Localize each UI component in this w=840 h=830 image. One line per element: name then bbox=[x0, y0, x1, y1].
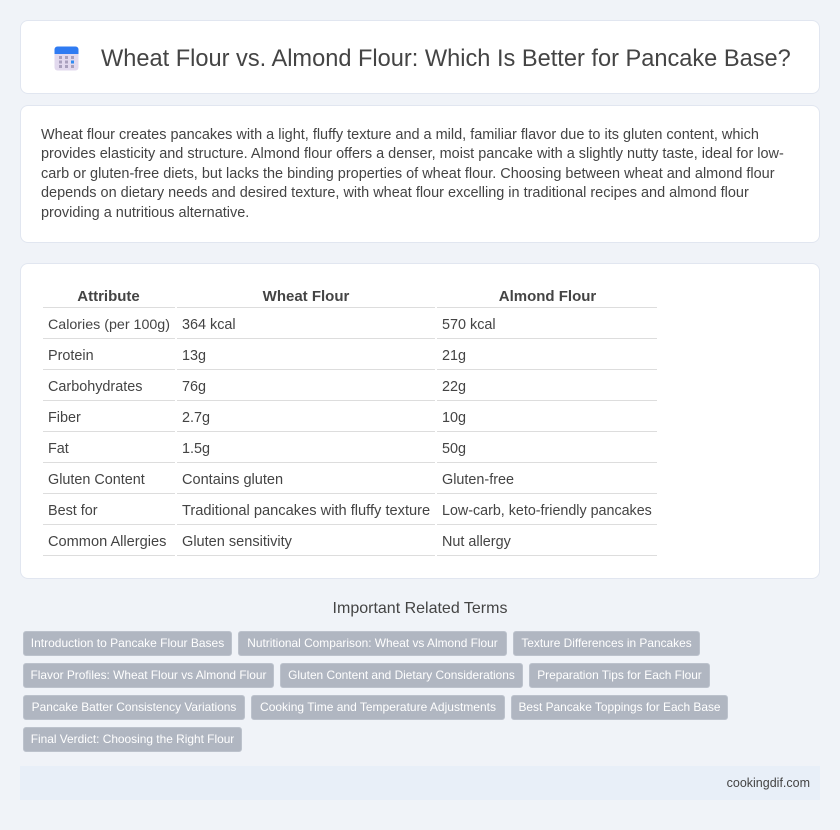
tag bbox=[23, 695, 245, 720]
tag bbox=[23, 663, 274, 688]
tag: Gluten Content and Dietary Considerations bbox=[288, 668, 515, 682]
related terms tags bbox=[23, 631, 728, 752]
row: carbohydrates bbox=[48, 379, 466, 395]
row: common allergies: Common Allergies bbox=[48, 534, 166, 550]
row: fat: Fat bbox=[48, 441, 69, 457]
row: protein: 21g bbox=[442, 348, 466, 364]
tag bbox=[238, 631, 507, 656]
tag bbox=[280, 663, 523, 688]
row: carbohydrates: 76g bbox=[182, 379, 206, 395]
tag bbox=[251, 695, 505, 720]
row: best for bbox=[48, 503, 652, 519]
title: Wheat Flour vs. Almond Flour: Which Is Better for Pancake Base? bbox=[101, 46, 791, 72]
row: fat: 1.5g bbox=[182, 441, 210, 457]
panel: introduction text bbox=[20, 105, 820, 243]
row: protein: Protein bbox=[48, 348, 94, 364]
icon: calendar bbox=[54, 46, 78, 70]
tag: Nutritional Comparison: Wheat vs Almond Flour bbox=[247, 636, 498, 650]
row: best for: Traditional pancakes with fluffy texture bbox=[182, 503, 430, 519]
heading: important related terms: Important Related Terms bbox=[333, 600, 507, 617]
title panel bbox=[20, 20, 820, 94]
row: calories: 570 kcal bbox=[442, 317, 496, 333]
row: common allergies: Nut allergy bbox=[442, 534, 511, 550]
row: fiber: Fiber bbox=[48, 410, 81, 426]
table header bbox=[77, 288, 596, 305]
row: calories: Calories (per 100g) bbox=[48, 317, 170, 333]
row: best for: Low-carb, keto-friendly pancakes bbox=[442, 503, 652, 519]
tag: Texture Differences in Pancakes bbox=[521, 636, 692, 650]
intro paragraph: depends on dietary needs and desired texture, with wheat flour excelling in traditional recipes and almond flour bbox=[41, 185, 749, 201]
intro paragraph: carb or gluten-free diets, but lacks the binding properties of wheat flour. Choosing between wheat and almond flour bbox=[41, 166, 775, 182]
row: gluten content: Contains gluten bbox=[182, 472, 283, 488]
tag: Final Verdict: Choosing the Right Flour bbox=[31, 732, 234, 746]
row: fiber: 10g bbox=[442, 410, 466, 426]
footer source text: cookingdif.com bbox=[727, 776, 810, 790]
row: calories: 364 kcal bbox=[182, 317, 236, 333]
row: common allergies: Gluten sensitivity bbox=[182, 534, 292, 550]
table header: Attribute bbox=[77, 288, 140, 305]
tag bbox=[511, 695, 728, 720]
tag bbox=[513, 631, 700, 656]
tag bbox=[529, 663, 710, 688]
intro paragraph: Wheat flour creates pancakes with a light, fluffy texture and a mild, familiar flavor due to its gluten content, which bbox=[41, 127, 759, 143]
row: protein: 13g bbox=[182, 348, 206, 364]
row: common allergies bbox=[48, 534, 511, 550]
row: fiber: 2.7g bbox=[182, 410, 210, 426]
tag: Preparation Tips for Each Flour bbox=[537, 668, 702, 682]
panel: comparison table bbox=[20, 263, 820, 579]
tag bbox=[23, 631, 232, 656]
tag bbox=[23, 727, 242, 752]
row: protein bbox=[48, 348, 466, 364]
row: carbohydrates: 22g bbox=[442, 379, 466, 395]
tag: Best Pancake Toppings for Each Base bbox=[518, 700, 721, 714]
row: gluten content: Gluten Content bbox=[48, 472, 145, 488]
row: fiber bbox=[48, 410, 466, 426]
intro paragraph: providing a nutritious alternative. bbox=[41, 205, 249, 221]
row: carbohydrates: Carbohydrates bbox=[48, 379, 142, 395]
footer bar bbox=[20, 766, 820, 800]
intro paragraph: provides elasticity and structure. Almond flour offers a denser, moist pancake with a slightly nutty taste, ideal for low- bbox=[41, 146, 784, 162]
intro paragraph bbox=[41, 127, 784, 221]
comparison table bbox=[43, 288, 657, 556]
row: gluten content bbox=[48, 472, 514, 488]
row: best for: Best for bbox=[48, 503, 98, 519]
tag: Introduction to Pancake Flour Bases bbox=[31, 636, 224, 650]
table header: Wheat Flour bbox=[263, 288, 349, 305]
table header: Almond Flour bbox=[499, 288, 596, 305]
tag: Cooking Time and Temperature Adjustments bbox=[260, 700, 496, 714]
row: fat: 50g bbox=[442, 441, 466, 457]
tag: Pancake Batter Consistency Variations bbox=[32, 700, 236, 714]
row: calories bbox=[48, 317, 496, 333]
row: gluten content: Gluten-free bbox=[442, 472, 514, 488]
tag: Flavor Profiles: Wheat Flour vs Almond Flour bbox=[31, 668, 266, 682]
row: fat bbox=[48, 441, 466, 457]
